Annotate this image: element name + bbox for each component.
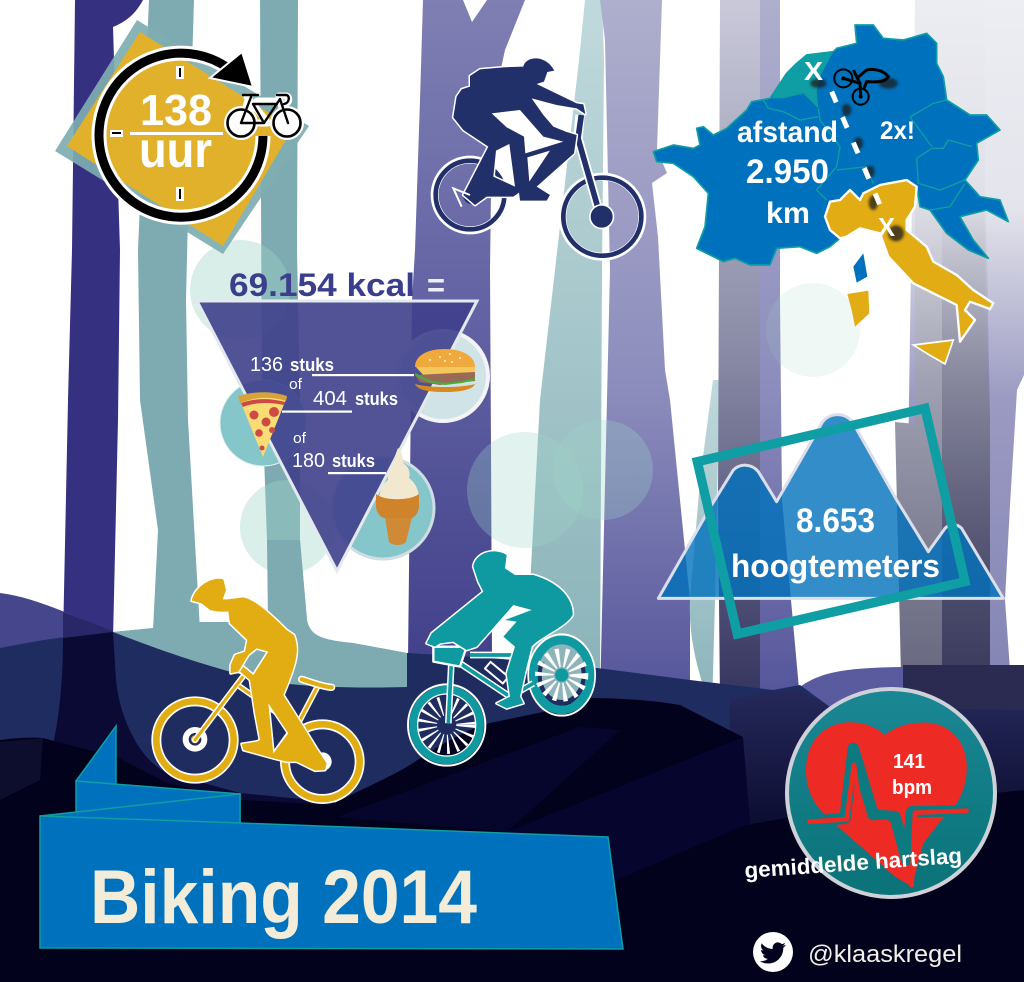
- distance value: 2.950: [746, 153, 829, 191]
- average heart rate caption: gemiddelde hartslag: [744, 843, 963, 883]
- gold frame: [195, 672, 332, 768]
- map: Sicily: [913, 340, 953, 364]
- teal frame: [433, 647, 533, 723]
- clock ticks: [110, 66, 184, 201]
- banner middle fold: [76, 781, 240, 826]
- burger count: [250, 354, 414, 376]
- front spoked wheel: [408, 684, 485, 766]
- ice cream count: 180: [292, 450, 325, 472]
- bpm value: 141: [893, 751, 925, 773]
- gold square: [67, 32, 293, 246]
- route shadow spots: [810, 78, 904, 241]
- circular arrow: [99, 52, 263, 217]
- burger count: 136: [250, 354, 283, 376]
- front wheel: [562, 177, 642, 257]
- elevation label: hoogtemeters: [731, 548, 940, 584]
- banner top flag: [76, 726, 116, 790]
- clock badge: 138 uur: [55, 20, 309, 254]
- rider and frame silhouette: [453, 58, 585, 205]
- elevation value: 8.653: [796, 502, 875, 540]
- repeat note: 2x!: [880, 117, 915, 145]
- small cyclist on map: [834, 69, 888, 105]
- banner main panel: [40, 794, 623, 949]
- icon: burger: [415, 349, 475, 392]
- fork, stem and hubs: [463, 115, 614, 229]
- handle text: @klaaskregel: [808, 941, 962, 968]
- icon: twitter bird: [753, 932, 793, 972]
- hours unit: uur: [139, 122, 212, 178]
- first "of": of: [289, 376, 303, 393]
- badge circle: [787, 689, 995, 897]
- map: country borders: [763, 100, 972, 210]
- title text: Biking 2014: [90, 855, 477, 940]
- twitter handle: [753, 932, 962, 972]
- ice cream count: stuks: [332, 451, 375, 471]
- rear wheel: [435, 160, 505, 230]
- title banner: [40, 726, 623, 949]
- mountain silhouette: [658, 415, 1003, 598]
- route start X: X: [804, 56, 824, 86]
- teal-framed gold diamond: [55, 20, 309, 254]
- ice cream circle: [332, 457, 434, 559]
- heading: kcal: 69.154 kcal: [229, 267, 415, 303]
- burger count: stuks: [290, 355, 334, 375]
- ECG line: [809, 765, 967, 885]
- inverted triangle: [197, 301, 477, 571]
- distance unit: km: [766, 197, 810, 230]
- rotated teal frame: [697, 408, 965, 634]
- distance label: afstand: [737, 116, 838, 149]
- map: France Germany Austria in blue: [653, 25, 1008, 265]
- second "of": of: [293, 430, 307, 447]
- pizza count: [282, 388, 398, 413]
- map: Italy in gold: [825, 180, 993, 342]
- pizza count: stuks: [355, 389, 398, 409]
- map: route to Italy: [653, 25, 1008, 364]
- map: Corsica: [853, 253, 867, 283]
- heart rate badge: [744, 689, 995, 897]
- burger circle: [398, 331, 488, 421]
- divider: [130, 132, 223, 135]
- map: Netherlands in teal: [772, 52, 833, 108]
- route end X: X: [878, 212, 896, 242]
- banner fold line: [40, 816, 240, 823]
- calorie section: [197, 267, 488, 571]
- map: Sardinia: [847, 291, 869, 327]
- cyclist: navy mountain biker: [435, 58, 642, 257]
- red heart: [806, 722, 967, 887]
- front wheel: [156, 701, 234, 779]
- elevation panel: mountains: [658, 408, 1003, 634]
- ECG line outline: [809, 748, 967, 860]
- pizza count: 404: [313, 388, 347, 410]
- rider silhouette: [427, 551, 573, 708]
- pizza circle: [220, 380, 306, 466]
- hours value: 138: [140, 86, 212, 135]
- cyclist: teal mountain biker: [408, 551, 595, 766]
- bpm unit: bpm: [892, 777, 932, 799]
- rider silhouette: [192, 579, 327, 771]
- route dashes: [832, 92, 885, 217]
- ice cream count: [292, 450, 386, 474]
- derailleur: [453, 188, 470, 207]
- rear wheel: [285, 724, 360, 799]
- icon: ice cream cone: [376, 448, 419, 545]
- icon: pizza slice: [238, 392, 287, 457]
- rear spoked wheel: [528, 634, 595, 716]
- icon: road bike: [224, 95, 304, 140]
- cyclist: gold mountain biker: [156, 579, 360, 799]
- equals sign: =: [427, 267, 445, 303]
